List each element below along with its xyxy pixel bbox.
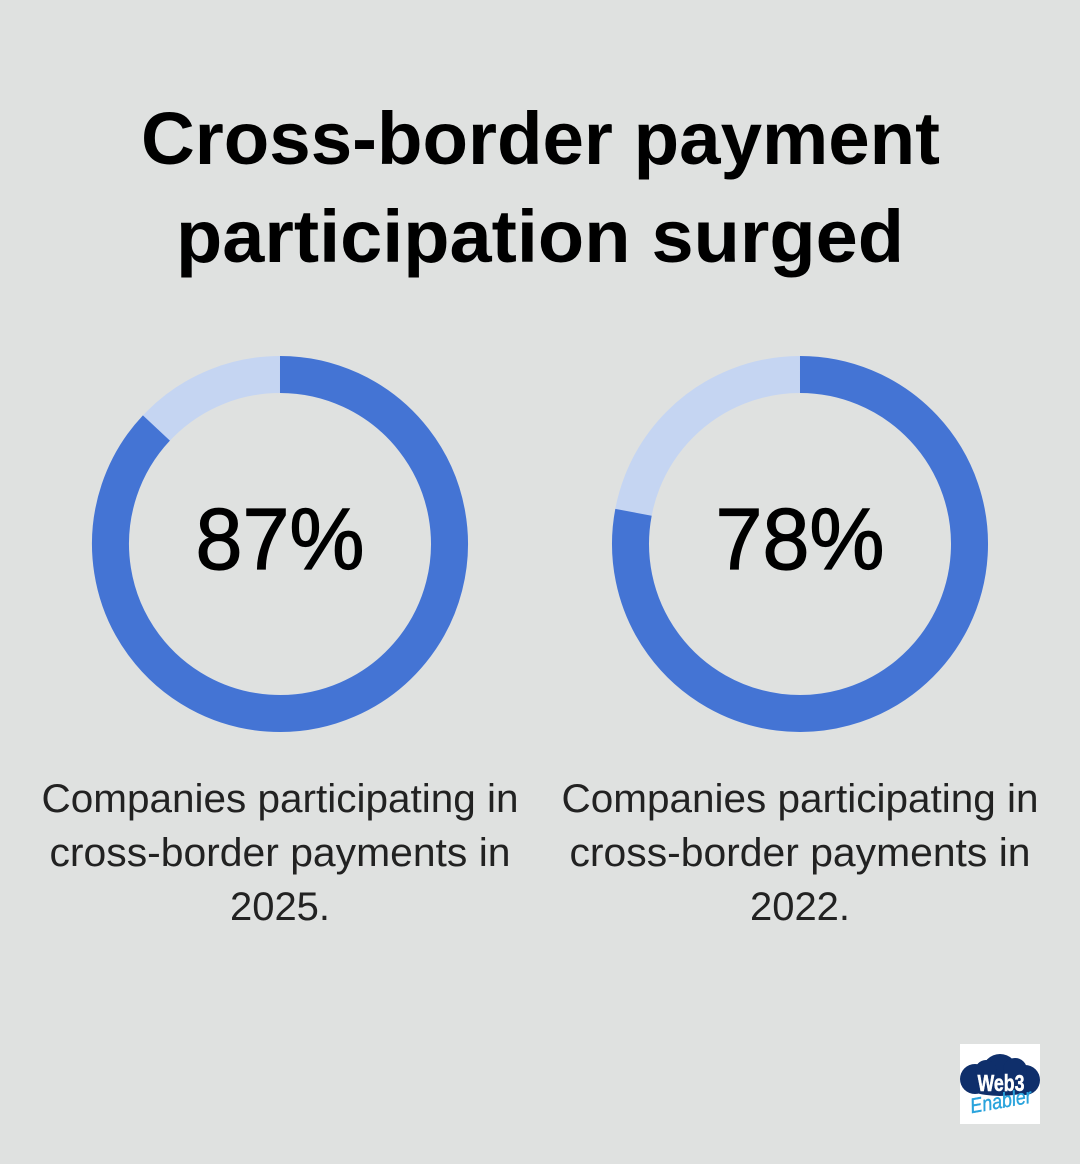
description: 2022: 2022. [750,885,850,929]
description: 2022: cross-border payments in [570,831,1030,875]
logo: Web3 Enabler: Enabler [968,1085,1034,1118]
description: 2022: Companies participating in [562,777,1038,821]
title [141,97,940,278]
value: 78%: 78% [716,491,884,588]
title: Cross-border payment [141,97,940,180]
icon: cloud [960,1054,1040,1096]
logo: Web3 Enabler [960,1044,1040,1124]
description: 2022 [562,777,1038,929]
title: participation surged [176,195,904,278]
description: 2025: Companies participating in [42,777,518,821]
donut chart: 78% [630,374,970,714]
panel: 2022 statistic [562,374,1038,929]
panel: 2025 statistic [42,374,518,929]
donut chart: 87% [110,374,449,714]
logo: Web3 Enabler: Web3 [978,1070,1024,1096]
value: 87%: 87% [196,491,364,588]
description: 2025: 2025. [230,885,330,929]
description: 2025: cross-border payments in [50,831,511,875]
description: 2025 [42,777,518,929]
